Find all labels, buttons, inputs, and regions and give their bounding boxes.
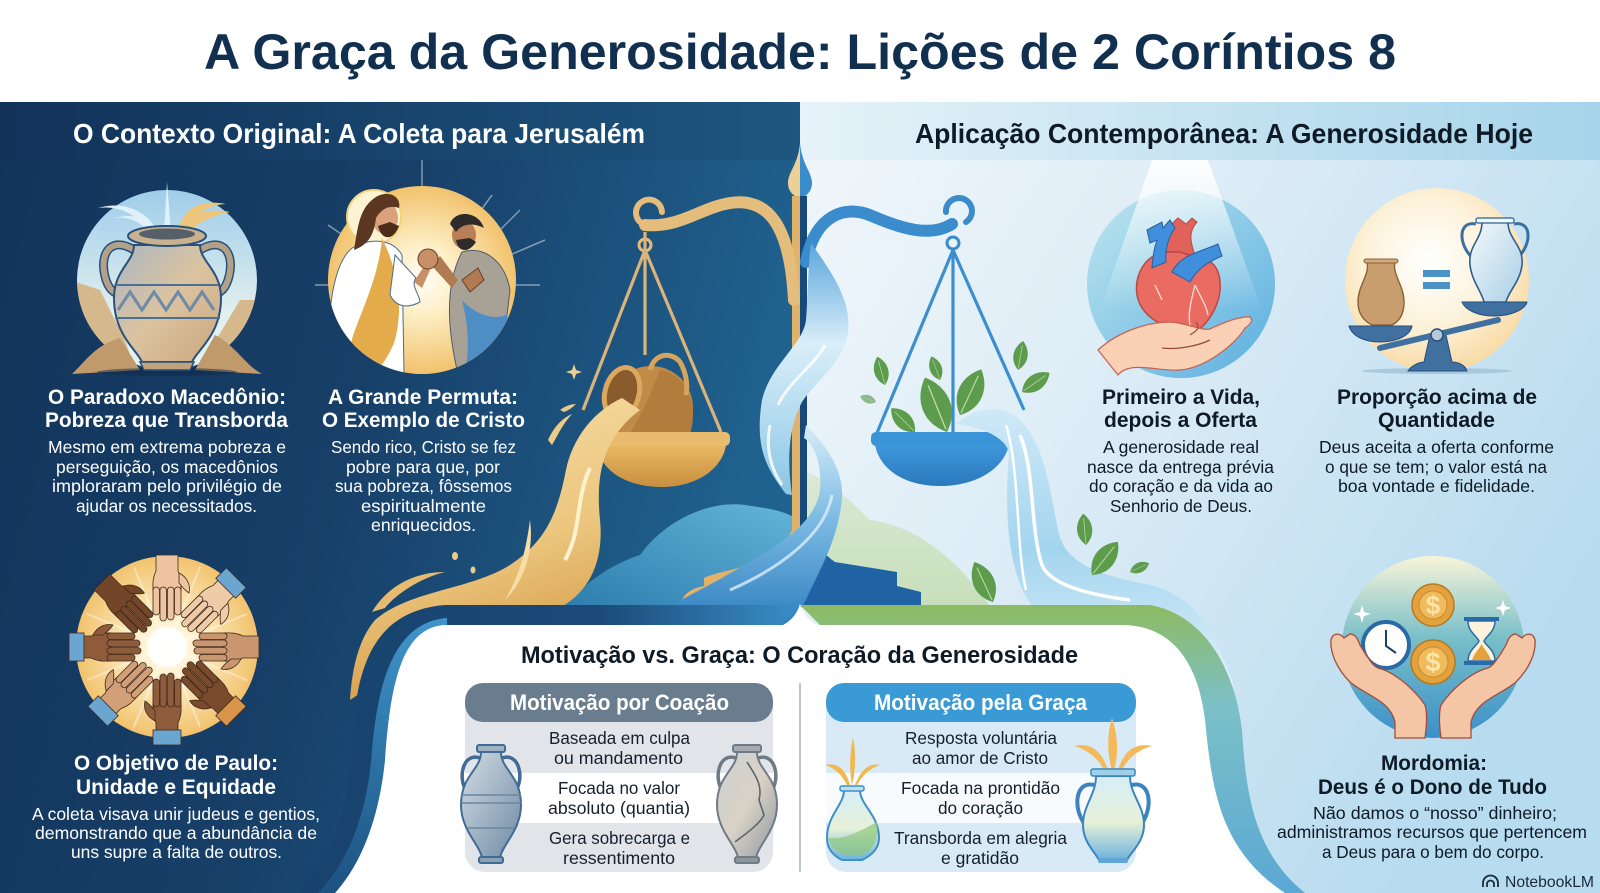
card text — [1087, 437, 1274, 516]
card text: Não damos o “nosso” dinheiro; — [1313, 803, 1557, 823]
panel: motivation comparison — [335, 604, 1285, 893]
card: stewardship — [1277, 556, 1587, 862]
hills behind scale — [563, 470, 990, 606]
card heading: Deus é o Dono de Tudo — [1318, 775, 1547, 799]
blue bowl — [871, 432, 1009, 486]
card heading — [45, 385, 289, 432]
blue beam — [806, 198, 1024, 433]
icon: overflowing clay pot — [70, 182, 265, 376]
ribbon: left navy band — [298, 605, 800, 893]
card heading: Pobreza que Transborda — [45, 408, 289, 432]
central water ribbon — [640, 243, 848, 625]
column: grace: Motivação pela Graça — [874, 690, 1088, 715]
card heading: Mordomia: — [1381, 751, 1487, 775]
card heading — [322, 385, 525, 432]
card text: Senhorio de Deus. — [1110, 496, 1252, 516]
card heading — [1337, 385, 1537, 432]
card heading: O Objetivo de Paulo: — [74, 751, 278, 775]
icon: hands holding coins, clock and hourglass: $ — [1425, 647, 1441, 677]
scale column and finial — [680, 143, 921, 606]
column: coercion — [461, 683, 777, 872]
card text: demonstrando que a abundância de — [35, 823, 317, 843]
ribbon: left inner blue strip — [318, 618, 447, 893]
card text: ajudar os necessitados. — [76, 496, 257, 516]
card text — [1277, 803, 1587, 862]
card text: boa vontade e fidelidade. — [1338, 476, 1535, 496]
column: grace — [825, 683, 1152, 872]
title: A Graça da Generosidade: Lições de 2 Coríntios 8 — [204, 24, 1396, 80]
card text: administramos recursos que pertencem — [1277, 822, 1587, 842]
panel heading: Motivação vs. Graça: O Coração da Generosidade — [521, 642, 1078, 669]
card text: perseguição, os macedônios — [56, 457, 278, 477]
column: coercion: Focada no valor — [558, 778, 680, 798]
ribbon: right green band — [800, 605, 1305, 893]
tipping gold pot — [599, 355, 693, 450]
column: grace: ao amor de Cristo — [912, 748, 1048, 768]
card text — [1319, 437, 1554, 496]
icon: Christ and man clasping hands — [315, 160, 545, 380]
card heading: Proporção acima de — [1337, 385, 1537, 409]
header: right column — [800, 102, 1600, 160]
card text: nasce da entrega prévia — [1087, 457, 1274, 477]
card heading — [1102, 385, 1260, 432]
card text: Deus aceita a oferta conforme — [1319, 437, 1554, 457]
card: Paul's goal — [32, 533, 320, 862]
card text: uns supre a falta de outros. — [71, 842, 282, 862]
card text: imploraram pelo privilégio de — [52, 476, 282, 496]
card: the great exchange — [315, 160, 545, 535]
card heading: O Exemplo de Cristo — [322, 408, 525, 432]
icon: hands holding coins, clock and hourglass — [1331, 556, 1535, 738]
card text: o que se tem; o valor está na — [1325, 457, 1547, 477]
column: coercion: ou mandamento — [554, 748, 683, 768]
column: coercion: ressentimento — [563, 848, 675, 868]
column: grace: do coração — [938, 798, 1023, 818]
card text: A coleta visava unir judeus e gentios, — [32, 804, 320, 824]
leaves near stream — [965, 513, 1151, 606]
header: left column — [0, 102, 800, 160]
card: proportion — [1319, 188, 1554, 496]
card text: espiritualmente — [361, 496, 486, 516]
gold stream — [350, 364, 640, 700]
gold beam — [583, 200, 794, 432]
card text: do coração e da vida ao — [1089, 476, 1273, 496]
card text — [32, 804, 320, 862]
card text: enriquecidos. — [371, 515, 476, 535]
card heading: O Paradoxo Macedônio: — [48, 385, 286, 409]
card text: sua pobreza, fôssemos — [335, 476, 512, 496]
icon: heart in hand — [1087, 160, 1275, 378]
column: coercion: absoluto (quantia) — [548, 798, 690, 818]
card heading: Unidade e Equidade — [76, 775, 276, 799]
NotebookLM logo: NotebookLM — [1505, 874, 1594, 891]
card heading — [74, 751, 278, 799]
column: grace: e gratidão — [941, 848, 1019, 868]
card: life first — [1087, 160, 1275, 516]
card text: a Deus para o bem do corpo. — [1322, 842, 1544, 862]
column: coercion: Motivação por Coação — [510, 690, 729, 715]
card text: pobre para que, por — [346, 457, 500, 477]
card text: A generosidade real — [1103, 437, 1259, 457]
card heading — [1318, 751, 1547, 799]
central scale illustration — [350, 143, 1235, 700]
leaves over blue bowl — [859, 340, 1054, 438]
column: grace: Focada na prontidão — [901, 778, 1060, 798]
card heading: depois a Oferta — [1104, 408, 1258, 432]
header: left column: O Contexto Original: A Coleta para Jerusalém — [73, 118, 645, 149]
card text: Sendo rico, Cristo se fez — [331, 437, 516, 457]
header: right column: Aplicação Contemporânea: A Generosidade Hoje — [915, 118, 1533, 149]
column: coercion: Baseada em culpa — [549, 728, 690, 748]
icon: balance with two jars — [1345, 188, 1529, 374]
icon: circle of hands — [53, 533, 281, 761]
card text: Mesmo em extrema pobreza e — [48, 437, 286, 457]
icon: cracked amphora — [717, 745, 777, 863]
card text — [48, 437, 286, 516]
icon: large glass amphora with fountain — [1074, 718, 1152, 863]
divider — [799, 683, 801, 872]
column: grace: Resposta voluntária — [905, 728, 1057, 748]
column: coercion: Gera sobrecarga e — [549, 828, 690, 848]
gold bowl — [592, 432, 730, 487]
card text — [331, 437, 516, 535]
water stream from blue bowl — [956, 409, 1235, 690]
column: grace: Transborda em alegria — [894, 828, 1067, 848]
card heading: A Grande Permuta: — [328, 385, 518, 409]
icon: gray amphora — [461, 745, 521, 863]
card: Macedonian paradox — [45, 182, 289, 516]
card heading: Primeiro a Vida, — [1102, 385, 1260, 409]
card heading: Quantidade — [1378, 408, 1495, 432]
icon: small glass vase with fountain — [825, 738, 880, 860]
icon: hands holding coins, clock and hourglass: $ — [1426, 590, 1441, 620]
